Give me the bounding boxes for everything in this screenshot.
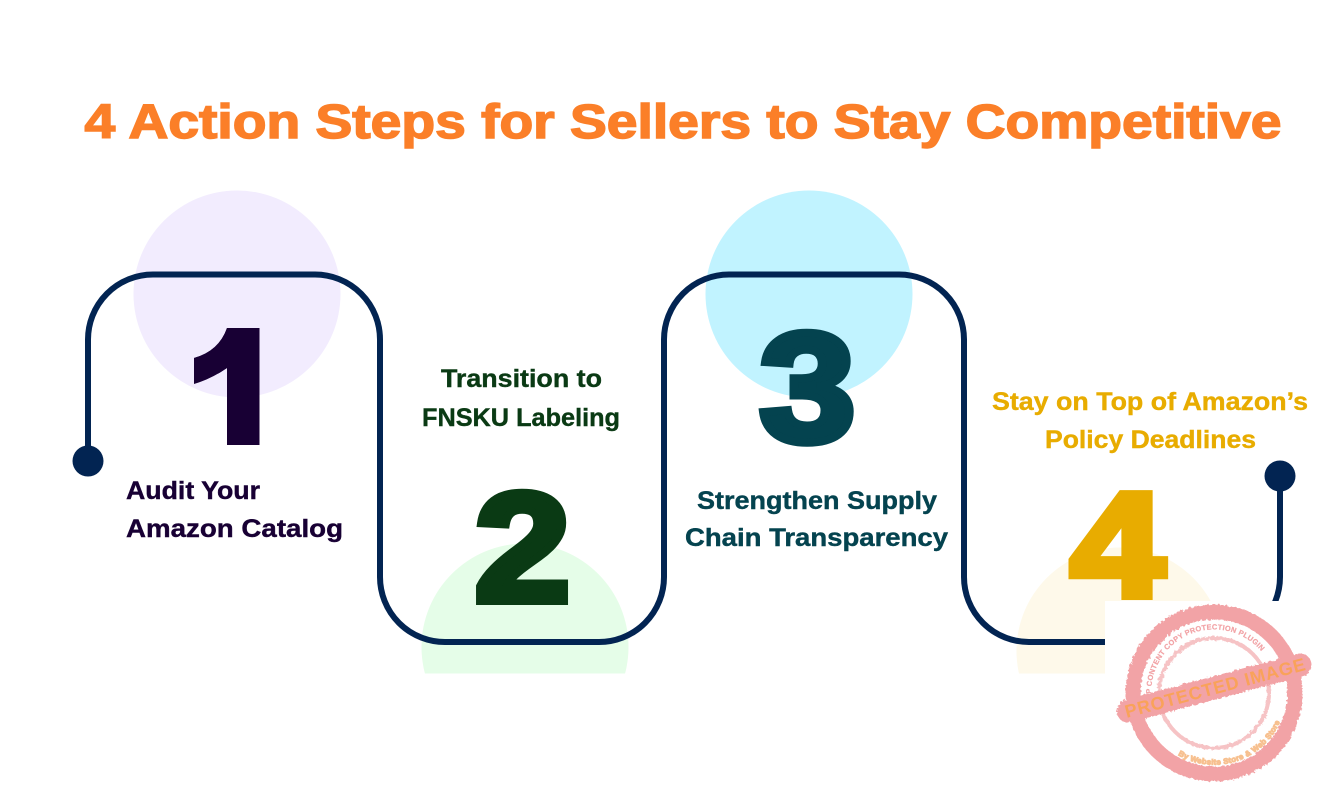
step 3 label — [685, 487, 948, 552]
step 4 label — [992, 388, 1308, 454]
step 3 label: Chain Transparency — [685, 524, 948, 552]
step 2 label — [422, 365, 620, 432]
step 2 background semicircle — [422, 544, 628, 674]
stamp band text: PROTECTED IMAGE — [1123, 654, 1307, 722]
step 2 label: Transition to — [441, 365, 602, 393]
watermark backing — [1105, 601, 1344, 800]
title: 4 Action Steps for Sellers to Stay Competitive — [84, 96, 1282, 149]
number 2: 2 — [474, 461, 570, 634]
connector line: winding path — [88, 274, 1280, 642]
stamp top text: WP CONTENT COPY PROTECTION PLUGIN — [1146, 624, 1265, 694]
step 3 background circle — [706, 190, 912, 398]
step 2 label: FNSKU Labeling — [422, 404, 620, 432]
step 1 label: Amazon Catalog — [126, 515, 343, 543]
step 3 label: Strengthen Supply — [697, 487, 937, 515]
watermark stamp — [1116, 604, 1312, 782]
infographic canvas — [72, 102, 1312, 782]
step 1 label: Audit Your — [126, 477, 260, 505]
step 1 background circle — [134, 190, 340, 398]
start dot — [72, 446, 104, 476]
step 4 label: Stay on Top of Amazon’s — [992, 388, 1308, 416]
step 4 label: Policy Deadlines — [1045, 426, 1256, 454]
end dot — [1264, 460, 1296, 492]
step 1 label — [126, 477, 343, 543]
number 4: 4 — [1070, 463, 1164, 628]
number 1: 1 — [176, 292, 276, 482]
number 3: 3 — [760, 301, 856, 474]
stamp bottom text: By Website Store & Web Store — [1178, 720, 1280, 766]
step 4 background semicircle — [1016, 548, 1210, 674]
